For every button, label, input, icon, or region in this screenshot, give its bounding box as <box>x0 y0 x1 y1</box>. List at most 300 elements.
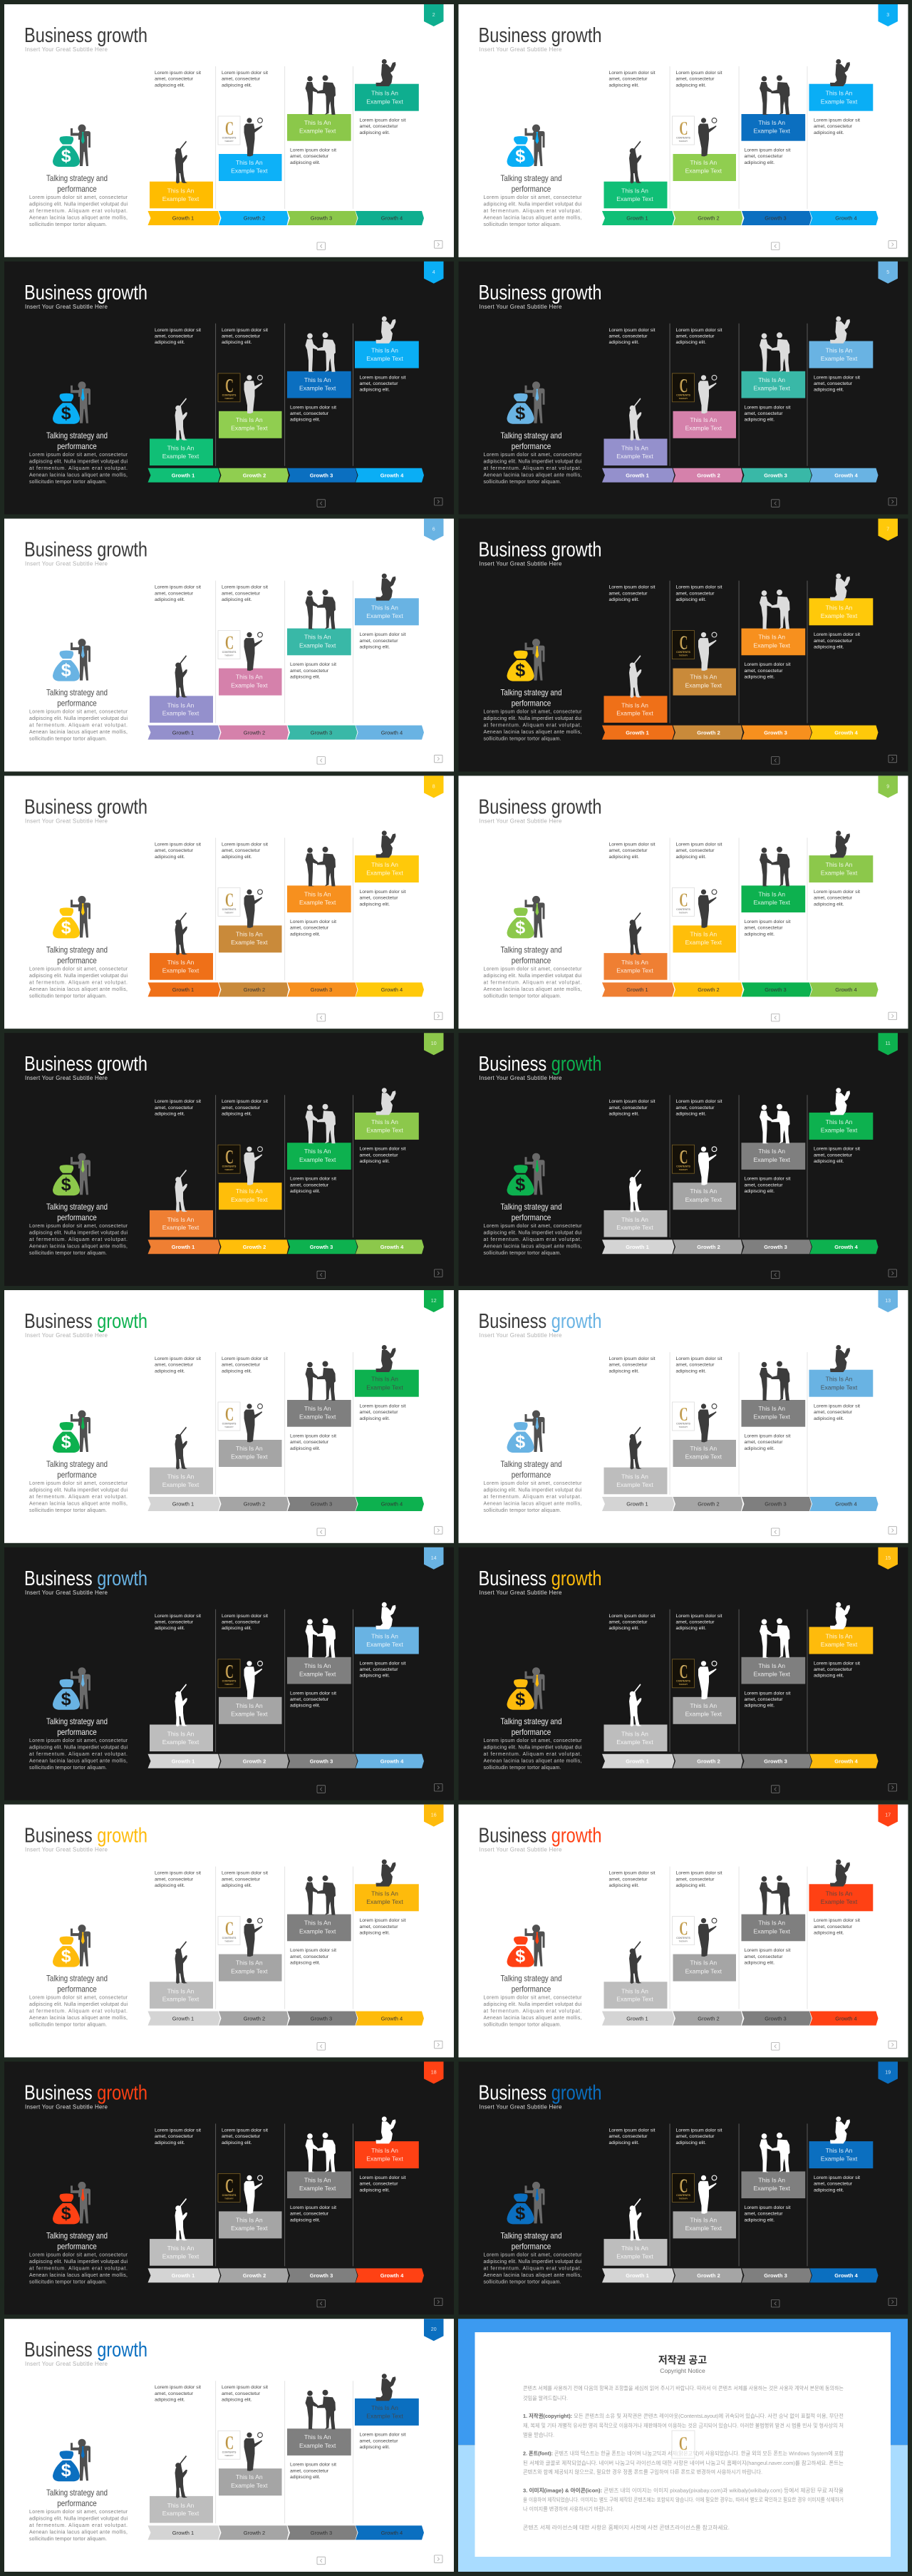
page ribbon <box>424 2319 443 2341</box>
note 3: amet, consectetur <box>744 669 783 674</box>
panel background <box>459 519 908 771</box>
step box 2 <box>673 411 736 438</box>
logo <box>218 1917 240 1945</box>
note 3: amet, consectetur <box>290 2212 329 2217</box>
note 4: adipiscing elit. <box>814 1674 844 1679</box>
arrow 1 <box>602 468 674 483</box>
left paragraph: Aenean lacinia lacus aliquet ante mollis, <box>29 730 128 735</box>
icon: money bag and man <box>53 1153 90 1195</box>
note 4: amet, consectetur <box>814 1925 853 1930</box>
note 2: adipiscing elit. <box>222 2398 252 2403</box>
page ribbon <box>878 1033 898 1055</box>
left paragraph: Lorem ipsum dolor sit amet, consectetur <box>29 967 128 972</box>
note 4: adipiscing elit. <box>814 1416 844 1421</box>
figure: man with gear <box>698 632 717 671</box>
arrow 1: Growth 1 <box>172 729 194 736</box>
page ribbon: 7 <box>886 527 889 532</box>
logo: C <box>225 1403 234 1425</box>
left paragraph: at fermentum. Aliquam erat volutpat. <box>483 466 582 471</box>
left paragraph: Lorem ipsum dolor sit amet, consectetur <box>483 1224 582 1229</box>
arrow 4 <box>809 1240 878 1254</box>
step box 2: This Is An <box>236 1187 263 1195</box>
logo <box>218 373 240 402</box>
step box 1: Example Text <box>616 710 653 717</box>
step box 2: This Is An <box>236 1702 263 1709</box>
step box 1: This Is An <box>621 701 648 709</box>
step box 4 <box>355 1113 419 1140</box>
figure: man pointing up <box>629 2198 641 2241</box>
subtitle: Insert Your Great Subtitle Here <box>479 1847 562 1853</box>
step box 3: Example Text <box>753 1156 791 1163</box>
step box 3 <box>287 2171 351 2198</box>
column dividers <box>670 838 807 980</box>
left paragraph: Aenean lacinia lacus aliquet ante mollis, <box>483 987 582 992</box>
note 2: adipiscing elit. <box>222 340 252 345</box>
step box 4: This Is An <box>371 90 398 97</box>
left paragraph: sollicitudin tempor tortor aliquam. <box>483 1251 561 1256</box>
step box 4 <box>355 1884 419 1911</box>
arrow 1: Growth 1 <box>626 1501 648 1508</box>
arrow 3: Growth 3 <box>310 1244 333 1250</box>
arrow 1: Growth 1 <box>626 215 648 222</box>
figure: man pointing up <box>629 912 641 955</box>
step box 2: Example Text <box>231 2482 268 2489</box>
arrow 3: Growth 3 <box>764 472 787 479</box>
note 1: Lorem ipsum dolor sit <box>608 1614 655 1619</box>
nav next <box>888 498 896 505</box>
arrow 4: Growth 4 <box>380 1244 404 1250</box>
icon: money bag and man <box>507 1410 544 1453</box>
notice heading: 저작권 공고 <box>658 2354 707 2366</box>
left paragraph: sollicitudin tempor tortor aliquam. <box>29 2537 107 2542</box>
arrow 3: Growth 3 <box>310 2272 333 2279</box>
page ribbon: 18 <box>431 2070 437 2075</box>
page ribbon: 3 <box>886 13 889 18</box>
logo <box>218 2431 240 2459</box>
step box 2: Example Text <box>685 1711 722 1718</box>
note 1: Lorem ipsum dolor sit <box>155 328 201 333</box>
nav next <box>435 1783 442 1791</box>
arrow 3 <box>742 2268 812 2282</box>
panel background <box>4 519 454 771</box>
left heading: Talking strategy and <box>46 1716 108 1726</box>
note 1: amet, consectetur <box>155 1877 194 1882</box>
step box 2: Example Text <box>685 2225 722 2232</box>
figure: kneeling man <box>376 59 396 86</box>
left paragraph: sollicitudin tempor tortor aliquam. <box>483 2023 561 2028</box>
left paragraph: Lorem ipsum dolor sit amet, consectetur <box>483 1996 582 2001</box>
logo: THERAPY <box>224 397 234 400</box>
arrow 3: Growth 3 <box>765 986 787 993</box>
left paragraph <box>483 1481 582 1513</box>
figure: kneeling man <box>830 574 850 601</box>
arrow 4: Growth 4 <box>834 2272 859 2279</box>
note 1: amet, consectetur <box>155 591 194 596</box>
left heading <box>46 173 108 194</box>
note 1: amet, consectetur <box>155 2391 194 2396</box>
arrow 2: Growth 2 <box>243 1244 266 1250</box>
step box 3: This Is An <box>304 1920 331 1927</box>
nav next <box>435 1269 442 1277</box>
logo: THERAPY <box>224 1940 234 1943</box>
title: Business growth <box>24 1825 147 1848</box>
arrow 1: Growth 1 <box>172 1244 195 1250</box>
step box 1 <box>150 2496 213 2523</box>
arrow 1: Growth 1 <box>626 2272 649 2279</box>
arrow 1 <box>602 726 674 740</box>
step box 4 <box>809 1627 873 1654</box>
note 1: Lorem ipsum dolor sit <box>155 1356 201 1361</box>
arrow 3 <box>742 726 812 740</box>
note 4: amet, consectetur <box>814 896 853 901</box>
note 1: amet, consectetur <box>608 77 648 82</box>
left paragraph <box>483 195 582 227</box>
step box 2: This Is An <box>690 2216 717 2223</box>
logo: CONTENTS <box>676 651 690 654</box>
left heading: performance <box>57 2498 97 2508</box>
logo <box>218 2173 240 2202</box>
left paragraph: adipiscing elit. Nulla imperdiet volutpat dui <box>483 2002 582 2007</box>
arrow 2: Growth 2 <box>697 729 720 736</box>
notice body: 2. 폰트(font): 콘텐츠 내의 텍스트는 한글 폰트는 네이버 나눔고딕과 서체(맑은고딕)이 사용되었습니다. 한글 외의 모든 폰트는 Windows System에 포함 <box>523 2450 844 2457</box>
note 2: amet, consectetur <box>675 2134 715 2139</box>
left heading: performance <box>57 699 97 709</box>
nav next <box>888 2041 896 2049</box>
step box 2 <box>673 1183 736 1210</box>
left heading: Talking strategy and <box>500 2230 561 2240</box>
left paragraph: Aenean lacinia lacus aliquet ante mollis, <box>483 2016 582 2021</box>
icon: money bag and man: $ <box>515 1432 525 1452</box>
note 2: amet, consectetur <box>675 591 715 596</box>
left paragraph: at fermentum. Aliquam erat volutpat. <box>483 1752 582 1757</box>
logo: CONTENTS <box>676 1165 690 1168</box>
note 1: amet, consectetur <box>155 1363 194 1368</box>
step box 1: Example Text <box>162 453 200 460</box>
panel background <box>4 2319 454 2572</box>
arrow 1: Growth 1 <box>172 1758 195 1765</box>
nav previous <box>771 757 779 764</box>
arrow 4 <box>809 2268 878 2282</box>
step box 2: Example Text <box>231 424 268 431</box>
left paragraph: Lorem ipsum dolor sit amet, consectetur <box>29 1224 128 1229</box>
step box 2 <box>219 669 282 696</box>
subtitle: Insert Your Great Subtitle Here <box>25 2361 108 2367</box>
note 4: amet, consectetur <box>814 381 853 386</box>
notice body: 벌을 받습니다. <box>523 2431 554 2438</box>
note 1: adipiscing elit. <box>155 83 185 88</box>
figure: handshake <box>760 847 789 886</box>
figure: kneeling man <box>376 1088 396 1115</box>
figure: man pointing up <box>175 1941 187 1984</box>
left heading <box>500 2230 561 2251</box>
figure: man pointing up <box>629 1941 641 1984</box>
note 4: adipiscing elit. <box>359 1159 390 1164</box>
note 4: amet, consectetur <box>359 2438 398 2443</box>
step box 3: This Is An <box>758 1405 785 1412</box>
step box 3 <box>741 1657 805 1684</box>
left heading: performance <box>57 1984 97 1994</box>
step box 3: Example Text <box>753 384 791 391</box>
slide 16 <box>4 1805 454 2057</box>
notice body: 된 서체와 글꼴로 제작되었습니다. 네이버 나눔고딕 라이선스에 대한 사항은 네이버 나눔고딕 홈페이지(hangeul.naver.com)를 참고하세요. 폰트는 <box>523 2459 844 2466</box>
icon: money bag and man: $ <box>515 1947 525 1967</box>
arrow 3: Growth 3 <box>765 2015 787 2021</box>
step box 3: Example Text <box>299 2442 336 2449</box>
light blue bottom band <box>458 2445 908 2572</box>
arrow 1: Growth 1 <box>626 1758 649 1765</box>
left paragraph <box>29 453 128 485</box>
nav next <box>435 2555 442 2562</box>
figure: kneeling man <box>830 1345 850 1372</box>
note 2: Lorem ipsum dolor sit <box>222 328 268 333</box>
column dividers <box>670 66 807 209</box>
step box 2 <box>673 1954 736 1982</box>
note 2: amet, consectetur <box>222 77 261 82</box>
step box 1 <box>150 953 213 980</box>
column dividers <box>670 1352 807 1495</box>
note 1: adipiscing elit. <box>155 1112 185 1117</box>
left paragraph: adipiscing elit. Nulla imperdiet volutpat dui <box>29 202 128 207</box>
arrow 1 <box>148 1497 220 1511</box>
arrow 4 <box>809 2011 878 2026</box>
left paragraph: sollicitudin tempor tortor aliquam. <box>483 222 561 227</box>
page ribbon <box>878 776 898 798</box>
left paragraph: at fermentum. Aliquam erat volutpat. <box>29 2009 128 2014</box>
icon: money bag and man: $ <box>61 1689 71 1709</box>
left heading: Talking strategy and <box>500 1974 561 1984</box>
figure: man pointing up <box>175 2198 187 2241</box>
left paragraph: sollicitudin tempor tortor aliquam. <box>483 2279 561 2284</box>
logo: THERAPY <box>679 1426 688 1428</box>
page ribbon: 10 <box>431 1041 437 1046</box>
icon: money bag and man <box>53 1925 90 1967</box>
step box 1 <box>150 182 213 208</box>
step box 1: This Is An <box>621 1987 648 1994</box>
nav previous <box>771 500 779 507</box>
note 3: adipiscing elit. <box>290 674 321 679</box>
logo <box>673 887 694 916</box>
left heading <box>46 1202 108 1222</box>
step box 4: This Is An <box>371 861 398 868</box>
note 1: Lorem ipsum dolor sit <box>155 842 201 847</box>
note 1: adipiscing elit. <box>608 1883 639 1888</box>
left paragraph: Aenean lacinia lacus aliquet ante mollis, <box>483 730 582 735</box>
arrow 2: Growth 2 <box>244 2530 265 2536</box>
notice subheading: Copyright Notice <box>660 2367 705 2374</box>
note 4: amet, consectetur <box>814 2182 853 2187</box>
page ribbon: 8 <box>432 784 435 789</box>
step box 3: Example Text <box>299 1671 336 1678</box>
step box 4: Example Text <box>366 1898 403 1905</box>
subtitle: Insert Your Great Subtitle Here <box>479 1075 562 1081</box>
step box 3 <box>741 371 805 398</box>
icon: money bag and man <box>507 896 544 938</box>
arrow 4: Growth 4 <box>835 2015 857 2021</box>
note 1: adipiscing elit. <box>155 597 185 602</box>
figure: kneeling man <box>830 1860 850 1887</box>
logo: THERAPY <box>679 911 688 914</box>
figure: kneeling man <box>830 830 850 857</box>
note 2: amet, consectetur <box>222 334 261 339</box>
note 1: adipiscing elit. <box>608 1626 639 1631</box>
arrow 4 <box>809 468 878 483</box>
logo <box>218 116 240 145</box>
arrow 1: Growth 1 <box>626 472 649 479</box>
left paragraph: at fermentum. Aliquam erat volutpat. <box>29 209 128 214</box>
step box 4: This Is An <box>371 1890 398 1897</box>
note 2: amet, consectetur <box>675 77 715 82</box>
left paragraph: Aenean lacinia lacus aliquet ante mollis, <box>29 1501 128 1507</box>
step box 4: Example Text <box>366 2412 403 2419</box>
note 3: adipiscing elit. <box>744 1961 774 1966</box>
arrow 3 <box>288 726 358 740</box>
step box 2 <box>673 669 736 696</box>
note 4: amet, consectetur <box>814 124 853 129</box>
nav next <box>435 2041 442 2049</box>
step box 1: This Is An <box>621 187 648 195</box>
panel background <box>459 1547 908 1800</box>
icon: money bag and man: $ <box>61 2203 71 2223</box>
note 3: amet, consectetur <box>744 1954 783 1959</box>
note 2: adipiscing elit. <box>675 1112 706 1117</box>
step box 3: Example Text <box>753 899 791 906</box>
step box 4: Example Text <box>366 2155 403 2163</box>
arrow 4: Growth 4 <box>834 472 859 479</box>
note 2: adipiscing elit. <box>675 1626 706 1631</box>
step box 4: Example Text <box>821 870 858 877</box>
arrow 2 <box>219 726 289 740</box>
note 1: adipiscing elit. <box>608 855 639 860</box>
figure: kneeling man <box>376 830 396 857</box>
step box 4: Example Text <box>366 1126 403 1133</box>
left paragraph <box>483 710 582 742</box>
left heading: performance <box>57 184 97 194</box>
note 1: Lorem ipsum dolor sit <box>155 585 201 590</box>
step box 1: This Is An <box>167 1216 195 1223</box>
arrow 2: Growth 2 <box>697 2272 720 2279</box>
arrow 3: Growth 3 <box>765 1501 787 1508</box>
note 4: Lorem ipsum dolor sit <box>814 1404 860 1408</box>
left heading: performance <box>512 1984 551 1994</box>
note 4: adipiscing elit. <box>814 1159 844 1164</box>
step box 2: Example Text <box>231 168 268 175</box>
icon: money bag and man: $ <box>61 917 71 937</box>
figure: man pointing up <box>175 2456 187 2498</box>
step box 2 <box>219 154 282 181</box>
step box 4: Example Text <box>821 2155 858 2163</box>
blue top band <box>458 2319 908 2445</box>
left heading: performance <box>512 2241 551 2251</box>
left paragraph: Aenean lacinia lacus aliquet ante mollis, <box>483 1758 582 1763</box>
figure: handshake <box>760 1361 789 1401</box>
step box 1: Example Text <box>162 2252 200 2260</box>
figure: man with gear <box>244 1403 262 1443</box>
note 3: adipiscing elit. <box>744 932 774 937</box>
icon: money bag and man <box>507 639 544 681</box>
note 4: adipiscing elit. <box>359 2445 390 2450</box>
icon: money bag and man: $ <box>515 1175 525 1195</box>
note 4: Lorem ipsum dolor sit <box>814 632 860 637</box>
title: Business growth <box>479 1567 601 1590</box>
step box 2: This Is An <box>690 1187 717 1195</box>
slide 14 <box>4 1547 454 1800</box>
title: Business growth <box>479 1053 601 1076</box>
column dividers <box>670 1095 807 1237</box>
note 1: adipiscing elit. <box>608 1369 639 1374</box>
panel background <box>459 4 908 257</box>
figure: handshake <box>305 1875 336 1915</box>
note 3: Lorem ipsum dolor sit <box>290 405 336 410</box>
left heading: Talking strategy and <box>46 688 108 698</box>
note 2: adipiscing elit. <box>675 1883 706 1888</box>
left paragraph: at fermentum. Aliquam erat volutpat. <box>29 2266 128 2271</box>
arrow 4 <box>809 726 878 740</box>
step box 1 <box>604 439 667 465</box>
figure: kneeling man <box>376 1602 396 1629</box>
step box 3 <box>287 1915 351 1941</box>
logo <box>218 631 240 659</box>
page ribbon: 14 <box>431 1556 437 1561</box>
note 4: Lorem ipsum dolor sit <box>359 890 405 895</box>
logo: CONTENTS <box>222 908 237 911</box>
logo: THERAPY <box>224 911 234 914</box>
arrow 3 <box>288 468 358 483</box>
step box 1 <box>150 1725 213 1751</box>
note 2: Lorem ipsum dolor sit <box>675 585 722 590</box>
logo: CONTENTS <box>222 1679 237 1682</box>
arrow 2: Growth 2 <box>698 215 720 222</box>
note 3: adipiscing elit. <box>290 2475 321 2480</box>
step box 2: Example Text <box>685 1967 722 1974</box>
arrow 4 <box>809 1754 878 1768</box>
arrow 1: Growth 1 <box>172 472 195 479</box>
step box 2 <box>219 1697 282 1724</box>
step box 3 <box>741 2171 805 2198</box>
logo: THERAPY <box>224 2454 234 2457</box>
page ribbon: 16 <box>431 1813 437 1818</box>
arrow 3: Growth 3 <box>764 729 787 736</box>
logo: C <box>680 1661 688 1682</box>
note 1: adipiscing elit. <box>155 2398 185 2403</box>
left paragraph: sollicitudin tempor tortor aliquam. <box>483 737 561 742</box>
title: Business growth <box>479 539 601 562</box>
logo <box>673 631 694 659</box>
arrow 3 <box>288 1497 358 1511</box>
logo: CONTENTS <box>676 1423 690 1426</box>
note 1: Lorem ipsum dolor sit <box>608 1356 655 1361</box>
left paragraph <box>483 453 582 485</box>
note 3: adipiscing elit. <box>290 418 321 423</box>
logo: THERAPY <box>679 1168 688 1171</box>
step box 2: This Is An <box>236 930 263 937</box>
logo: C <box>225 632 234 654</box>
left paragraph <box>29 1481 128 1513</box>
left paragraph <box>29 710 128 742</box>
note 4: Lorem ipsum dolor sit <box>814 118 860 123</box>
note 2: adipiscing elit. <box>222 1626 252 1631</box>
column dividers <box>216 1352 353 1495</box>
title: Business growth <box>479 1310 601 1333</box>
nav previous <box>771 1786 779 1793</box>
left paragraph: adipiscing elit. Nulla imperdiet volutpat dui <box>29 974 128 979</box>
left paragraph: adipiscing elit. Nulla imperdiet volutpat dui <box>29 1745 128 1750</box>
left paragraph: adipiscing elit. Nulla imperdiet volutpat dui <box>29 2002 128 2007</box>
step box 2: Example Text <box>231 1967 268 1974</box>
left paragraph: Aenean lacinia lacus aliquet ante mollis, <box>29 2016 128 2021</box>
nav previous <box>771 1528 779 1535</box>
note 2: Lorem ipsum dolor sit <box>222 2385 268 2390</box>
step box 3 <box>741 629 805 655</box>
